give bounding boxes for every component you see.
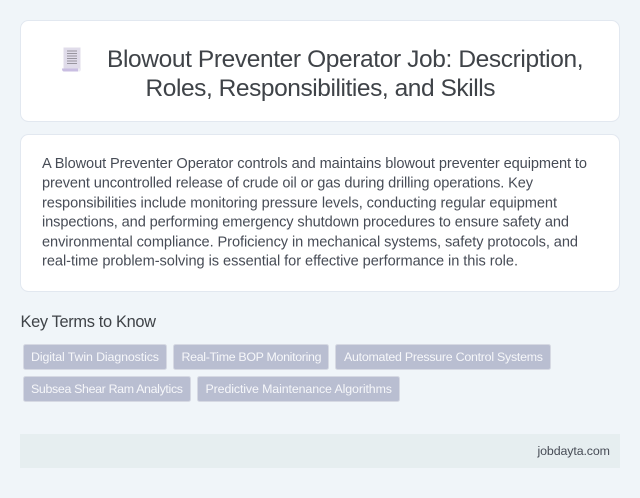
text block: description: responsibilities include monitoring pressure levels, conducting regular equipment (42, 196, 557, 212)
title: Roles, Responsibilities, and Skills (146, 75, 496, 102)
title (107, 46, 584, 102)
text block: description: environmental compliance. Proficiency in mechanical systems, safety protocols, and (42, 234, 578, 250)
tags: key terms (24, 344, 550, 402)
tag: digital twin diagnostics: Digital Twin Diagnostics (31, 350, 159, 364)
panel: description card (20, 134, 620, 292)
panel: title card (20, 20, 620, 122)
tag: real-time bop monitoring (174, 344, 328, 370)
footer: source: jobdayta.com (536, 444, 610, 458)
tag: real-time bop monitoring: Real-Time BOP Monitoring (182, 350, 322, 364)
tag: predictive maintenance algorithms (198, 376, 400, 402)
tag: digital twin diagnostics (24, 344, 166, 370)
tag: subsea shear ram analytics (24, 376, 190, 402)
tag: automated pressure control systems (336, 344, 550, 370)
icon: document scroll (62, 48, 81, 72)
tag: subsea shear ram analytics: Subsea Shear Ram Analytics (31, 382, 183, 396)
text block: description: prevent uncontrolled release of crude oil or gas during drilling operations. Key (42, 176, 534, 192)
title: Blowout Preventer Operator Job: Description, (107, 46, 584, 73)
text block: description: A Blowout Preventer Operator controls and maintains blowout preventer equipment to (42, 156, 587, 172)
text block: description (42, 156, 587, 270)
heading: key terms: Key Terms to Know (20, 313, 156, 331)
footer bar (20, 434, 620, 468)
text block: description: inspections, and performing emergency shutdown procedures to ensure safety and (42, 214, 569, 230)
tag: predictive maintenance algorithms: Predictive Maintenance Algorithms (206, 382, 392, 396)
tag: automated pressure control systems: Automated Pressure Control Systems (344, 350, 543, 364)
text block: description: real-time problem-solving is essential for effective performance in this role. (42, 254, 518, 270)
